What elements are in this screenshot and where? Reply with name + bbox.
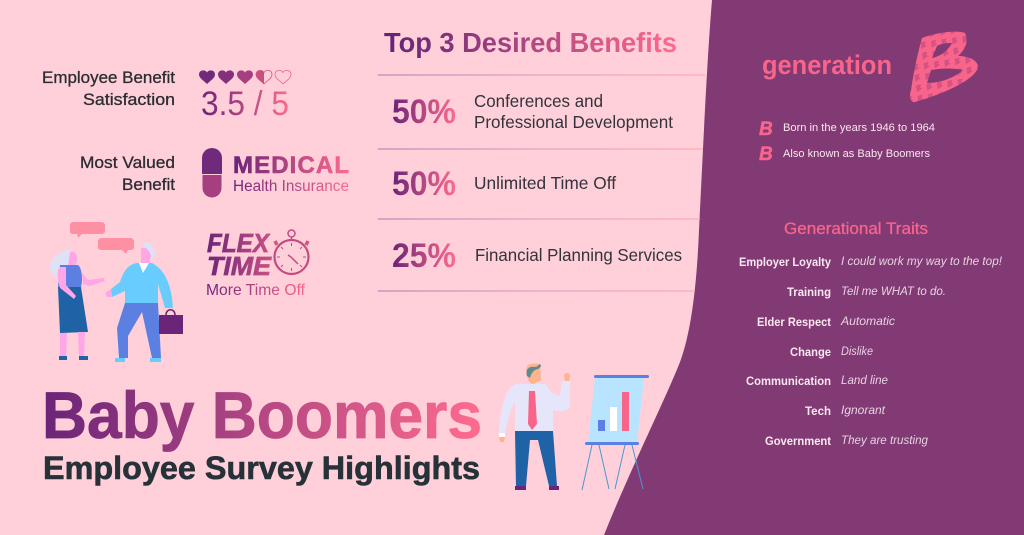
benefit 1 label: Professional Development xyxy=(474,112,673,132)
subtitle: employee survey highlights: Employee Survey Highlights xyxy=(43,450,480,486)
medical text: MEDICAL xyxy=(233,152,349,179)
benefit 1 label: Conferences and xyxy=(474,91,603,111)
panel: generation B xyxy=(739,32,1003,448)
bullet 2 text: Also known as Baby Boomers xyxy=(783,148,930,160)
traits table: Change xyxy=(790,345,831,359)
illustration: presenter with chart xyxy=(499,364,649,490)
speech bubble left xyxy=(70,222,105,238)
traits table: Employer Loyalty xyxy=(739,255,831,269)
woman xyxy=(50,250,105,360)
heading: top 3 desired benefits: Top 3 Desired Benefits xyxy=(384,27,677,58)
icon: stopwatch xyxy=(274,230,308,274)
benefit 2 percent: 50% xyxy=(392,165,456,203)
icon: bullet B: B xyxy=(759,144,773,165)
icon: hearts rating xyxy=(199,70,291,84)
traits table: Tell me WHAT to do. xyxy=(841,284,946,298)
benefit 3 percent: 25% xyxy=(392,237,456,275)
traits table: Automatic xyxy=(840,314,895,328)
bullet 1 text: Born in the years 1946 to 1964 xyxy=(783,122,935,134)
score 3.5 / 5: 3.5 / 5 xyxy=(201,85,289,123)
traits table: Training xyxy=(787,285,831,299)
benefit list xyxy=(378,74,705,292)
title: baby boomers: Baby Boomers xyxy=(42,378,482,452)
traits table: Elder Respect xyxy=(757,315,831,329)
bullet 1 xyxy=(759,119,935,140)
traits table: Ignorant xyxy=(841,403,886,417)
panel: generation B background xyxy=(604,0,1024,535)
label: employee benefit satisfaction: Satisfaction xyxy=(83,91,175,109)
presenter xyxy=(499,364,570,490)
speech bubble right xyxy=(98,238,134,254)
traits table: I could work my way to the top! xyxy=(841,254,1003,268)
flex time text: TIME xyxy=(207,251,272,281)
icon: medical pill xyxy=(202,148,222,198)
benefit 1 percent: 50% xyxy=(392,93,456,131)
traits table: Land line xyxy=(841,373,888,387)
traits table: Communication xyxy=(746,374,831,388)
bullet 2 xyxy=(759,144,930,165)
benefit 2 label: Unlimited Time Off xyxy=(474,173,616,193)
more time off text: More Time Off xyxy=(206,282,306,299)
generation heading: generation xyxy=(762,50,892,80)
traits table: Tech xyxy=(805,404,831,418)
traits table: Dislike xyxy=(841,344,873,358)
label: most valued benefit: Most Valued xyxy=(80,154,175,172)
traits table: They are trusting xyxy=(841,433,928,447)
icon: large patterned B xyxy=(910,32,978,102)
man xyxy=(105,242,183,362)
flip chart xyxy=(582,375,649,490)
label: most valued benefit: Benefit xyxy=(122,176,175,194)
traits table xyxy=(739,254,1003,448)
benefit 3 label: Financial Planning Services xyxy=(475,245,682,265)
icon: bullet B: B xyxy=(759,119,773,140)
label: employee benefit satisfaction: Employee Benefit xyxy=(42,69,175,87)
generational traits heading: Generational Traits xyxy=(784,220,928,238)
illustration: two seniors talking xyxy=(50,222,183,362)
flex time text: FLEX xyxy=(207,228,271,258)
traits table: Government xyxy=(765,434,831,448)
health insurance text: Health Insurance xyxy=(233,178,349,195)
